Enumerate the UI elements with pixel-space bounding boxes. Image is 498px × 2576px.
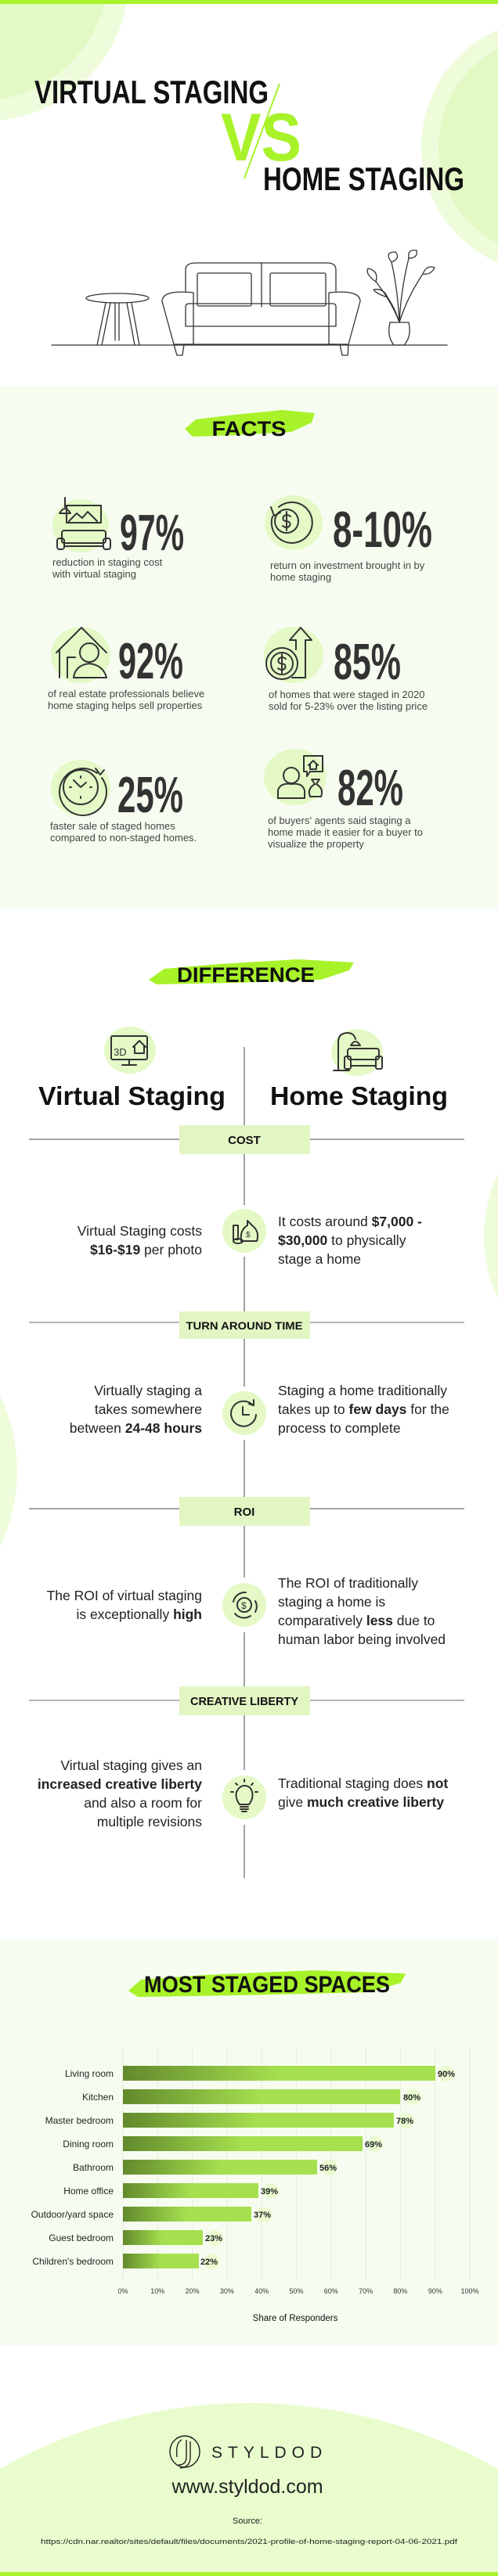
bar chart: 60%	[324, 2287, 338, 2295]
fact: 92%	[48, 627, 204, 711]
fact: 25%	[50, 760, 197, 844]
decoration: top-right circles	[421, 30, 498, 263]
footer: Source:	[233, 2517, 262, 2526]
footer: https://cdn.nar.realtor/sites/default/files/documents/2021-profile-of-home-staging-report-04-06-2021.pdf	[41, 2538, 457, 2546]
column header: virtual staging	[38, 1027, 226, 1110]
fact: 85%	[264, 627, 428, 712]
fact: 82%: home made it easier for a buyer to	[268, 826, 423, 838]
row: turn around time: Virtually staging a	[94, 1383, 202, 1398]
row: creative liberty: increased creative liberty	[38, 1776, 202, 1792]
fact: 8-10%: return on investment brought in by	[270, 559, 425, 571]
fact: 85%: 85%	[334, 633, 401, 690]
bar chart: 0%	[117, 2287, 128, 2295]
icon: roi cycle: $	[241, 1600, 247, 1611]
bar chart: 90%	[428, 2287, 442, 2295]
row: turn around time: process to complete	[278, 1420, 401, 1436]
row: cost	[29, 1125, 464, 1267]
row: cost: COST	[228, 1134, 261, 1147]
bar chart: 70%	[359, 2287, 373, 2295]
row: creative liberty: Traditional staging does not	[278, 1775, 448, 1791]
bar chart: Dining room	[63, 2139, 114, 2150]
row: turn around time	[29, 1311, 464, 1440]
row: roi	[29, 1497, 464, 1647]
bar chart: 39%	[261, 2187, 278, 2196]
fact: 85%: of homes that were staged in 2020	[269, 689, 424, 700]
row: roi: comparatively less due to	[278, 1613, 435, 1628]
bar chart: 30%	[220, 2287, 234, 2295]
bar chart: 40%	[254, 2287, 269, 2295]
decoration: side circles	[0, 1173, 498, 1546]
fact: 97%	[52, 498, 184, 580]
bar chart	[31, 2048, 479, 2323]
fact: 8-10%	[265, 495, 432, 583]
bar chart: Home office	[63, 2186, 114, 2196]
column header: home staging	[270, 1029, 448, 1110]
row: roi: The ROI of virtual staging	[47, 1588, 202, 1603]
logo	[170, 2436, 327, 2468]
top accent bar	[0, 0, 498, 4]
bar chart: 50%	[289, 2287, 304, 2295]
icon: roi cycle	[222, 1583, 266, 1627]
fact: 92%: 92%	[118, 632, 183, 689]
logo: STYLDOD	[211, 2444, 327, 2462]
title: VS	[221, 100, 301, 175]
heading: difference: DIFFERENCE	[177, 963, 315, 987]
row: turn around time: takes somewhere	[95, 1401, 202, 1417]
bar chart: 100%	[460, 2287, 479, 2295]
bar chart: Bathroom	[73, 2162, 114, 2173]
row: turn around time: Staging a home traditionally	[278, 1383, 447, 1398]
fact: 82%: of buyers' agents said staging a	[268, 815, 411, 826]
row: creative liberty: multiple revisions	[97, 1814, 202, 1829]
bar chart: Guest bedroom	[49, 2232, 114, 2243]
bar chart: 10%	[150, 2287, 164, 2295]
row: creative liberty: CREATIVE LIBERTY	[190, 1695, 298, 1708]
bar chart: 69%	[365, 2140, 382, 2150]
column header: virtual staging: 3D	[114, 1046, 127, 1058]
fact: 8-10%: 8-10%	[333, 501, 432, 558]
fact: 82%: 82%	[337, 759, 403, 816]
row: creative liberty: and also a room for	[84, 1795, 202, 1811]
row: roi: is exceptionally high	[77, 1606, 202, 1622]
footer: www.styldod.com	[171, 2476, 323, 2498]
row: roi: The ROI of traditionally	[278, 1575, 418, 1591]
row: cost: stage a home	[278, 1251, 361, 1267]
row: cost: $16-$19 per photo	[90, 1242, 202, 1257]
bar chart: Living room	[65, 2068, 114, 2079]
bar chart: 22%	[200, 2258, 218, 2267]
comparison timeline spine	[244, 1047, 245, 1878]
fact: 25%: faster sale of staged homes	[50, 820, 175, 832]
icon: light bulb	[222, 1775, 266, 1819]
row: creative liberty	[29, 1686, 464, 1829]
row: creative liberty: Virtual staging gives an	[60, 1758, 202, 1773]
icon: clock refresh	[222, 1391, 266, 1435]
row: creative liberty: give much creative liberty	[278, 1794, 444, 1810]
bar chart: 90%	[438, 2070, 455, 2079]
fact: 97%: with virtual staging	[52, 568, 136, 580]
fact: 97%: 97%	[120, 504, 184, 561]
heading: facts: FACTS	[211, 417, 287, 441]
fact: 82%: visualize the property	[268, 838, 364, 850]
row: turn around time: TURN AROUND TIME	[186, 1319, 302, 1332]
panel: facts	[0, 386, 498, 908]
bar chart: Master bedroom	[45, 2115, 114, 2126]
bar chart: Share of Responders	[253, 2314, 338, 2323]
row: roi: staging a home is	[278, 1594, 385, 1610]
decoration: top-left circles	[0, 0, 128, 121]
row: roi: human labor being involved	[278, 1632, 446, 1647]
fact: 8-10%: home staging	[270, 571, 331, 583]
bar chart: Kitchen	[82, 2092, 114, 2103]
fact: 25%: 25%	[117, 766, 183, 823]
title	[34, 74, 464, 197]
bar chart: Outdoor/yard space	[31, 2209, 114, 2220]
bar chart: 37%	[254, 2211, 271, 2220]
bar chart: Children's bedroom	[32, 2256, 114, 2267]
column header: virtual staging: Virtual Staging	[38, 1081, 226, 1110]
row: cost: $30,000 to physically	[278, 1232, 406, 1248]
fact: 97%: reduction in staging cost	[52, 556, 163, 568]
fact: 25%: compared to non-staged homes.	[50, 832, 197, 844]
bar chart: 78%	[396, 2117, 413, 2126]
icon: money bag: $	[246, 1231, 251, 1239]
fact: 85%: sold for 5-23% over the listing price	[269, 700, 428, 712]
row: cost: Virtual Staging costs	[78, 1223, 202, 1239]
row: cost: It costs around $7,000 -	[278, 1214, 422, 1229]
row: turn around time: between 24-48 hours	[70, 1420, 202, 1436]
footer	[0, 2403, 498, 2576]
bottom accent bar	[0, 2572, 498, 2576]
bar chart: 56%	[319, 2164, 337, 2173]
panel: most staged spaces	[0, 1939, 498, 2345]
fact: 92%: home staging helps sell properties	[48, 700, 203, 711]
icon: money bag	[222, 1209, 266, 1253]
bar chart: 23%	[205, 2234, 222, 2243]
illustration: living room line art	[52, 250, 447, 355]
fact: 82%	[264, 749, 423, 850]
heading: difference	[149, 959, 354, 987]
heading: most staged spaces: MOST STAGED SPACES	[144, 1972, 390, 1998]
heading: facts	[185, 410, 315, 441]
row: turn around time: takes up to few days for the	[278, 1401, 449, 1417]
bar chart: 80%	[393, 2287, 407, 2295]
bar chart: 80%	[403, 2093, 420, 2103]
bar chart: 20%	[186, 2287, 200, 2295]
title: VIRTUAL STAGING	[34, 74, 269, 110]
fact: 92%: of real estate professionals believe	[48, 688, 204, 700]
column header: home staging: Home Staging	[270, 1081, 448, 1110]
row: roi: ROI	[234, 1506, 254, 1519]
